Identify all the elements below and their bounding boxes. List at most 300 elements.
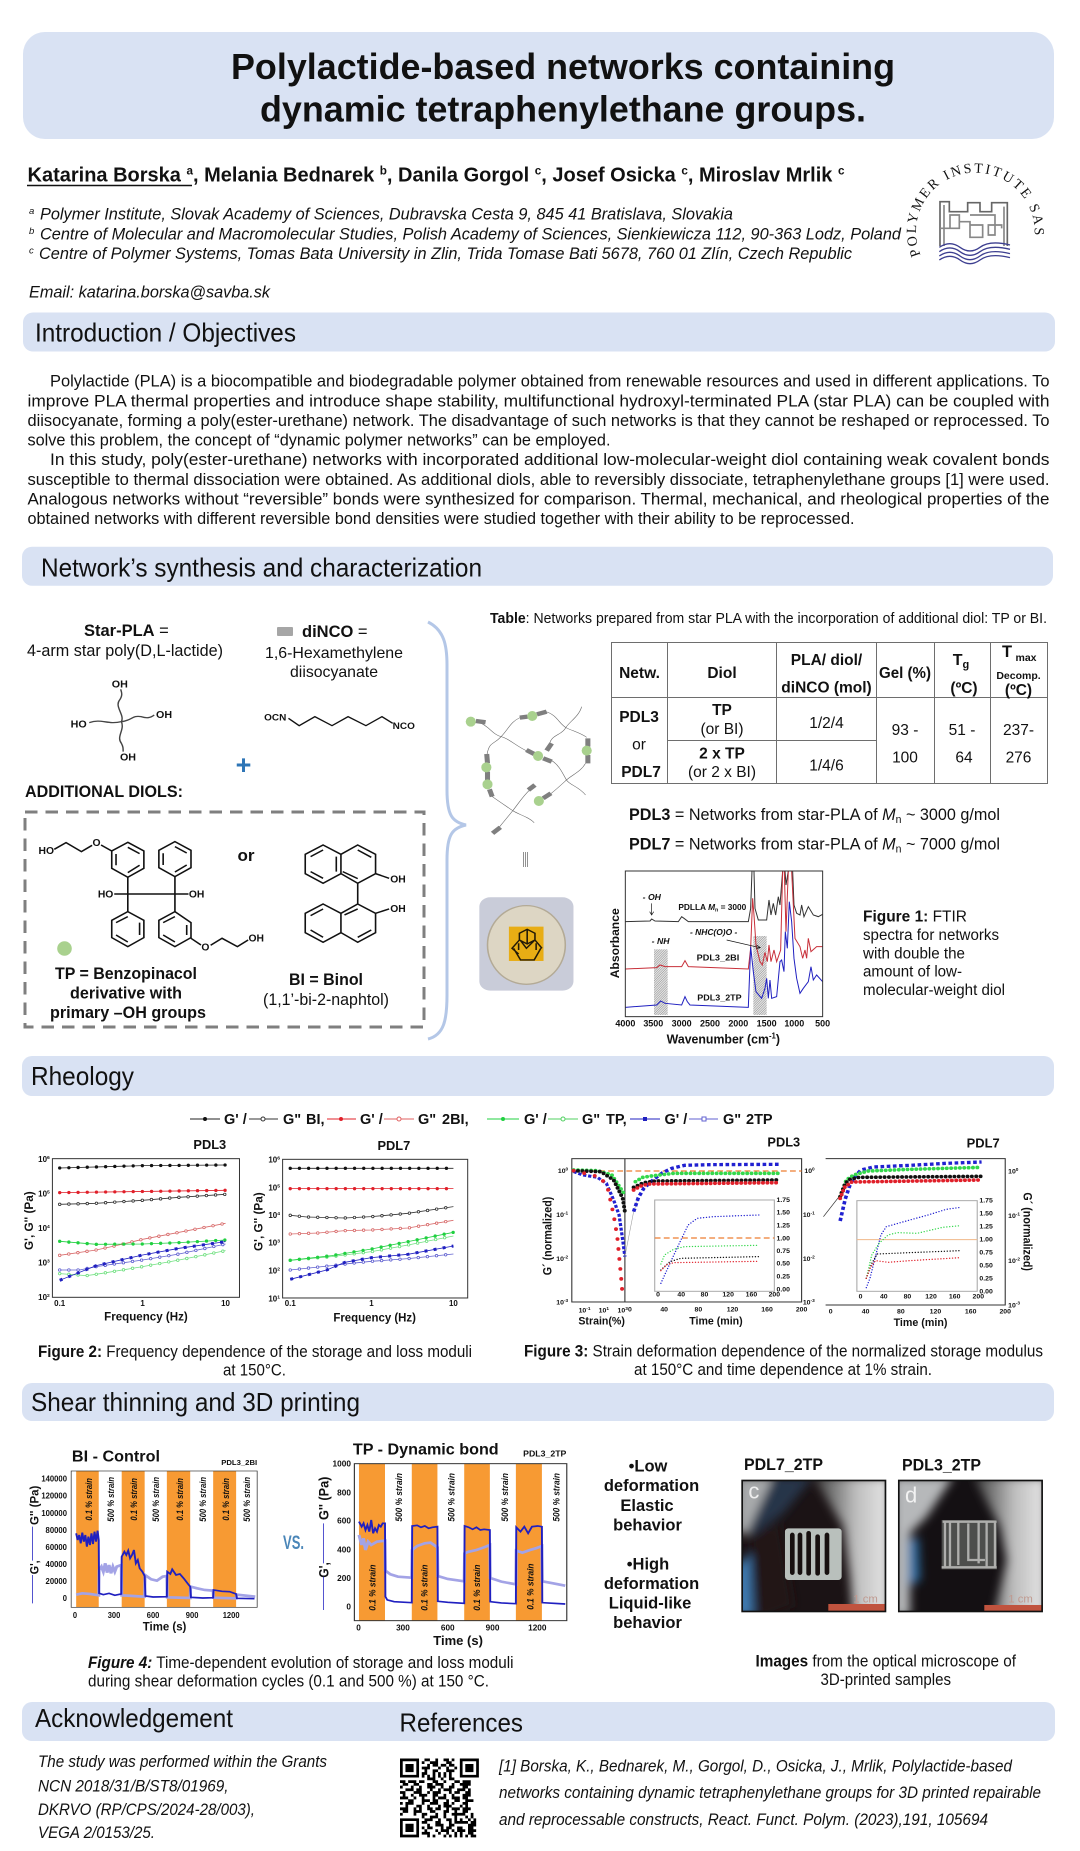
chart: frequency sweep PDL3: 10 — [38, 1293, 47, 1302]
FTIR chart: - NHC(O)O - — [690, 927, 738, 937]
chart: TP dynamic bond cycles: 0.1 % strain — [471, 1564, 482, 1611]
chart: frequency sweep PDL7: 10 — [268, 1266, 277, 1275]
chart: frequency sweep PDL7: 10 — [268, 1239, 277, 1248]
table: networks: 51 - — [949, 722, 975, 739]
chart: strain and time dependence PDL3: 10 — [556, 1256, 564, 1263]
chart: strain and time dependence PDL3: 10 — [618, 1308, 625, 1315]
chart: BI control cycles: 600 — [147, 1611, 160, 1620]
chart: time dependence PDL7: -2 — [1016, 1256, 1020, 1261]
chart: time dependence PDL7: 0.50 — [979, 1263, 993, 1270]
molecule: benzopinacol derivative: O — [201, 943, 210, 953]
rheology legend — [190, 1112, 773, 1128]
figure 2 caption — [38, 1343, 472, 1380]
microscope photos of printed samples — [737, 1477, 1047, 1620]
affiliations — [29, 206, 902, 263]
chart: frequency sweep PDL3: 5 — [47, 1189, 50, 1195]
table: networks: 276 — [1006, 750, 1031, 766]
chart: strain and time dependence PDL3: 10 — [579, 1308, 586, 1315]
chart: strain and time dependence PDL3: Time (min) — [689, 1316, 743, 1327]
equals lines — [524, 852, 528, 867]
table: networks: 64 — [955, 750, 973, 766]
chart: frequency sweep PDL7: 10 — [268, 1183, 277, 1192]
rheology legend: BI, — [306, 1112, 325, 1128]
FTIR chart: ) — [776, 1032, 780, 1046]
chart: frequency sweep PDL7: 1 — [277, 1294, 280, 1300]
chart: frequency sweep PDL3: 10 — [38, 1224, 47, 1233]
chart: TP dynamic bond cycles: 300 — [396, 1623, 410, 1633]
introduction text: Polylactide (PLA) is a biocompatible and biodegradable polymer obtained from renewable resources and used in different applications. To — [50, 373, 1050, 391]
chart: time dependence PDL7: -1 — [1016, 1211, 1020, 1216]
diNCO label — [265, 623, 403, 681]
chart: frequency sweep PDL3: 10 — [38, 1259, 47, 1268]
figure 4 caption: Figure 4: Time-dependent evolution of storage and loss moduli — [88, 1654, 514, 1672]
chart: frequency sweep PDL7: 10 — [268, 1211, 277, 1220]
chart: time dependence PDL7: 200 — [973, 1294, 984, 1301]
photo: network disc — [479, 897, 573, 991]
FTIR chart: 1000 — [784, 1019, 804, 1029]
acknowledgement text — [38, 1753, 327, 1842]
FTIR chart: 1500 — [757, 1019, 777, 1029]
chart: strain and time dependence PDL3: 10 — [556, 1300, 564, 1307]
affiliations: c — [29, 246, 34, 256]
chart: time dependence PDL7: G´ (normalized) — [1020, 1192, 1033, 1271]
chart: strain and time dependence PDL3: 0 — [812, 1167, 815, 1171]
table: networks: Decomp. — [996, 670, 1041, 682]
chart: time dependence PDL7: 80 — [897, 1309, 905, 1315]
chart: strain and time dependence PDL3: 1.00 — [777, 1236, 790, 1242]
chart: TP dynamic bond cycles: G', — [316, 1562, 332, 1578]
table: networks: 237- — [1003, 722, 1034, 739]
figure 2 caption: at 150°C. — [223, 1362, 286, 1380]
chart: strain and time dependence PDL3: 0.75 — [777, 1248, 790, 1255]
chart: frequency sweep PDL7: PDL7 — [377, 1139, 410, 1153]
diNCO label: 1,6-Hexamethylene — [265, 645, 403, 662]
chart: strain and time dependence PDL3: -1 — [586, 1306, 591, 1311]
chart: frequency sweep PDL7: 6 — [277, 1156, 280, 1162]
chart: time dependence PDL7: 40 — [880, 1294, 888, 1301]
chart: strain and time dependence PDL3: 10 — [558, 1168, 566, 1175]
green dot marker for TP — [57, 941, 72, 956]
introduction text: Analogous networks without “reversible” bonds were synthesized for comparison. Thermal, mechanical, and rheological properties of the — [28, 490, 1050, 508]
FTIR chart — [608, 871, 830, 1046]
chart: frequency sweep PDL7: 10 — [268, 1156, 277, 1165]
authors: c — [535, 164, 542, 178]
PDL definitions: n — [896, 814, 901, 826]
chart: BI control cycles: 0 — [63, 1594, 67, 1603]
chart: strain and time dependence PDL3: -1 — [811, 1210, 815, 1215]
figure 2 caption: Figure 2: Frequency dependence of the storage and loss moduli — [38, 1343, 472, 1361]
chart: BI control cycles: 500 % strain — [198, 1477, 208, 1522]
chart: time dependence PDL7: 160 — [949, 1294, 961, 1301]
email: Email: katarina.borska@savba.sk — [29, 284, 271, 302]
rheology legend: G' / — [524, 1112, 547, 1128]
photo titles — [744, 1456, 981, 1474]
chart: TP dynamic bond cycles: 500 % strain — [446, 1473, 456, 1522]
FTIR chart: Absorbance — [608, 908, 622, 978]
table: networks: diNCO (mol) — [781, 680, 872, 696]
authors: , Josef Osicka — [541, 164, 681, 186]
chart: strain and time dependence PDL3: -1 — [564, 1210, 569, 1215]
chart: BI control cycles: 0.1 % strain — [221, 1478, 231, 1521]
chart: strain and time dependence PDL3: 120 — [722, 1292, 734, 1299]
chart: BI control cycles: 120000 — [41, 1491, 67, 1501]
chart: BI control cycles: 300 — [108, 1611, 121, 1620]
chart: TP dynamic bond cycles: 0.1 % strain — [419, 1564, 430, 1611]
molecule: star-PLA and hexamethylene diisocyanate: OH — [112, 680, 128, 691]
table: networks: T — [953, 652, 963, 669]
table: networks — [612, 642, 1048, 784]
plus sign: + — [236, 750, 251, 780]
chart: time dependence PDL7: 120 — [925, 1294, 937, 1301]
chart: strain and time dependence PDL3: 3 — [625, 1306, 628, 1311]
affiliations: Centre of Molecular and Macromolecular Studies, Polish Academy of Sciences, Sienkiewicza 112, 90-363 Lodz, Poland — [40, 226, 902, 244]
introduction text: diisocyanate, forming a poly(ester-urethane) network. The disadvantage of such networks is that they cannot be reshaped or reprocessed. To — [28, 412, 1050, 430]
chart: TP dynamic bond cycles: 1200 — [528, 1623, 547, 1633]
chart: strain and time dependence PDL3: 0.50 — [777, 1261, 790, 1268]
behaviour text: Liquid-like — [609, 1594, 691, 1612]
chart: BI control cycles: Time (s) — [143, 1620, 186, 1633]
molecule: benzopinacol derivative: O — [92, 838, 101, 849]
FTIR chart: 3500 — [643, 1019, 663, 1029]
chart: BI control cycles — [29, 1447, 257, 1633]
rheology legend: G" — [723, 1112, 741, 1128]
section bar: Introduction / Objectives — [23, 312, 1055, 352]
behaviour text — [604, 1458, 699, 1632]
chart: time dependence PDL7: 10 — [1008, 1258, 1016, 1265]
chart: TP dynamic bond cycles: 0.1 % strain — [367, 1564, 378, 1611]
chart: TP dynamic bond cycles: 900 — [486, 1623, 499, 1633]
PDL definitions: PDL3 = Networks from star-PLA of M — [629, 805, 896, 824]
chart: BI control cycles: 100000 — [41, 1509, 67, 1518]
photo titles: PDL7_2TP — [744, 1456, 823, 1474]
acknowledgement text: NCN 2018/31/B/ST8/01969, — [38, 1778, 228, 1796]
chart: time dependence PDL7: Time (min) — [894, 1317, 948, 1329]
introduction text: obtained networks with different reversible bond densities were studied together with their ability to be reprocessed. — [28, 510, 854, 528]
rheology legend: G' / — [224, 1112, 247, 1128]
chart: frequency sweep PDL7: 0.1 — [285, 1299, 296, 1308]
chart: strain and time dependence PDL3: 40 — [660, 1307, 668, 1313]
chart: frequency sweep PDL3: 1 — [140, 1299, 145, 1308]
FTIR chart: = 3000 — [718, 902, 747, 912]
introduction text: In this study, poly(ester-urethane) networks with incorporated additional low-molecular-weight diol containing weak covalent bonds — [50, 451, 1050, 469]
chart: BI control cycles: BI - Control — [72, 1447, 160, 1465]
photo: PDL7_2TP: c — [748, 1478, 759, 1503]
chart: strain and time dependence PDL3: 10 — [803, 1300, 811, 1307]
FTIR chart: -1 — [769, 1032, 776, 1041]
photo: PDL7_2TP: 1 cm — [853, 1594, 878, 1606]
chart: time dependence PDL7: 160 — [965, 1309, 977, 1315]
chart: TP dynamic bond cycles: 1000 — [333, 1459, 351, 1469]
rheology legend: 2BI, — [442, 1112, 469, 1128]
rheology legend: G" — [418, 1112, 436, 1128]
figure 1 caption: spectra for networks — [863, 927, 999, 944]
chart: frequency sweep PDL3: 4 — [47, 1224, 50, 1230]
chart: frequency sweep PDL3: 10 — [38, 1189, 47, 1198]
molecule: star-PLA and hexamethylene diisocyanate: OH — [156, 710, 172, 721]
chart: strain and time dependence PDL3: 200 — [796, 1307, 808, 1313]
chart: frequency sweep PDL7: G', G'' (Pa) — [252, 1192, 266, 1251]
FTIR chart: PDL3_2TP — [697, 993, 742, 1003]
chart: frequency sweep PDL7: 10 — [449, 1299, 458, 1308]
chart: TP dynamic bond cycles: 0 — [356, 1623, 361, 1633]
chart: time dependence PDL7: 1.75 — [979, 1198, 993, 1205]
figure 4 caption — [88, 1654, 514, 1690]
FTIR chart: 2500 — [700, 1019, 720, 1029]
chart: frequency sweep PDL7: 10 — [268, 1294, 277, 1303]
photo titles: PDL3_2TP — [902, 1456, 981, 1474]
behaviour text: •High — [627, 1556, 669, 1574]
chart: BI control cycles: 500 % strain — [242, 1477, 252, 1522]
molecule: star-PLA and hexamethylene diisocyanate: HO — [71, 720, 87, 731]
chart: time dependence PDL7: 0 — [859, 1294, 863, 1301]
chart: BI control cycles: 60000 — [46, 1543, 67, 1552]
rheology legend: G' / — [360, 1112, 383, 1128]
chart: strain and time dependence PDL3: 0 — [566, 1167, 569, 1171]
chart: time dependence PDL7: 10 — [1008, 1213, 1016, 1220]
molecule: benzopinacol derivative — [39, 838, 264, 953]
figure 1 caption: amount of low- — [863, 964, 962, 981]
chart: time dependence PDL7: 0 — [1016, 1167, 1019, 1172]
dashed panel: additional diols — [25, 812, 424, 1027]
figure 4 caption: during shear deformation cycles (0.1 and 500 %) at 150 °C. — [88, 1672, 489, 1690]
molecule: benzopinacol derivative: OH — [189, 890, 204, 901]
chart: time dependence PDL7: 80 — [904, 1294, 912, 1301]
chart: strain and time dependence PDL3: 10 — [803, 1212, 811, 1219]
introduction text: solve this problem, the concept of “dynamic polymer networks” can be employed. — [28, 432, 610, 450]
chart: strain and time dependence PDL3: -3 — [564, 1298, 569, 1303]
affiliations: Centre of Polymer Systems, Tomas Bata University in Zlin, Trida Tomase Bati 5678, 760 01 Zlín, Czech Republic — [39, 245, 853, 263]
table: networks: PLA/ diol/ — [791, 652, 863, 669]
star-PLA label: Star-PLA = — [84, 622, 169, 640]
table: networks: 100 — [892, 750, 918, 766]
chart: strain and time dependence PDL3: -2 — [811, 1254, 815, 1259]
figure 1 caption: molecular-weight diol — [863, 982, 1005, 999]
section bar: Shear thinning and 3D printing — [22, 1383, 1054, 1421]
chart: strain and time dependence PDL3: 0.25 — [777, 1274, 790, 1281]
additional diols heading: ADDITIONAL DIOLS: — [25, 783, 183, 801]
authors: b — [380, 164, 387, 178]
authors: , Danila Gorgol — [387, 164, 535, 186]
molecule: star-PLA and hexamethylene diisocyanate: OH — [120, 753, 136, 763]
chart: BI control cycles: 0.1 % strain — [175, 1478, 185, 1521]
chart: frequency sweep PDL7 — [252, 1139, 468, 1325]
section bar: Acknowledgement and References: Acknowledgement — [35, 1703, 234, 1733]
chart: time dependence PDL7: 10 — [1008, 1303, 1016, 1309]
chart: time dependence PDL7: -3 — [1016, 1301, 1020, 1306]
chart: frequency sweep PDL3: G', G'' (Pa) — [22, 1191, 36, 1250]
chart: strain and time dependence PDL3: 10 — [804, 1168, 812, 1175]
diNCO label: diNCO = — [302, 623, 368, 641]
chart: frequency sweep PDL3: 0.1 — [54, 1299, 66, 1308]
section bar: Rheology — [22, 1056, 1054, 1096]
acknowledgement text: VEGA 2/0153/25. — [38, 1824, 155, 1842]
chart: strain and time dependence PDL3: Strain(%) — [578, 1316, 625, 1327]
section bar: Acknowledgement and References — [22, 1702, 1055, 1741]
molecule: benzopinacol derivative: HO — [98, 890, 114, 901]
chart: frequency sweep PDL7: 2 — [277, 1266, 280, 1272]
chart: BI control cycles: 900 — [186, 1611, 199, 1620]
chart: strain and time dependence PDL3: 40 — [677, 1292, 685, 1299]
chart: time dependence PDL7: 1.25 — [979, 1224, 993, 1231]
chart: frequency sweep PDL3: 10 — [221, 1299, 231, 1308]
chart: time dependence PDL7: 0 — [829, 1309, 833, 1315]
rheology legend: 2TP — [746, 1112, 773, 1128]
chart: BI control cycles: 140000 — [41, 1474, 67, 1483]
images caption: 3D-printed samples — [820, 1671, 951, 1689]
chart: strain and time dependence PDL3: 1.25 — [777, 1223, 790, 1230]
behaviour text: behavior — [613, 1614, 682, 1632]
table: networks: or — [632, 736, 646, 754]
chart: time dependence PDL7: 120 — [930, 1309, 941, 1315]
table: networks: g — [963, 659, 969, 671]
table: networks: (ºC) — [950, 680, 978, 697]
figure 1 caption: with double the — [862, 945, 965, 962]
TP label: primary –OH groups — [50, 1003, 206, 1022]
chart: frequency sweep PDL3: 10 — [38, 1155, 47, 1164]
FTIR chart: 500 — [815, 1019, 830, 1029]
chart: BI control cycles: G', — [29, 1560, 41, 1574]
molecule: binol: OH — [390, 904, 406, 915]
images caption: Images from the optical microscope of — [756, 1652, 1016, 1670]
chart: time dependence PDL7: 1.00 — [979, 1237, 993, 1244]
FTIR chart: - NH — [652, 936, 670, 946]
affiliations: b — [29, 226, 34, 237]
table: networks: TP — [712, 702, 732, 719]
chart: time dependence PDL7: 200 — [999, 1309, 1011, 1315]
chart: strain and time dependence PDL3: 10 — [803, 1256, 811, 1263]
TP label: derivative with — [70, 984, 182, 1002]
chart: TP dynamic bond cycles: 800 — [337, 1488, 351, 1497]
behaviour text: deformation — [604, 1477, 699, 1495]
chart: strain and time dependence PDL3: 160 — [761, 1307, 773, 1313]
chart: TP dynamic bond cycles: 600 — [337, 1516, 351, 1526]
chart: strain and time dependence PDL3: 80 — [695, 1307, 703, 1313]
chart: BI control cycles: G'' (Pa) — [29, 1485, 41, 1525]
chart: strain and time dependence PDL3: 10 — [599, 1308, 606, 1315]
PDL definitions: PDL7 = Networks from star-PLA of M — [629, 834, 896, 854]
section bar: Rheology: Rheology — [31, 1061, 134, 1091]
authors: c — [838, 164, 845, 178]
BI label: BI = Binol — [289, 970, 363, 989]
FTIR chart: Wavenumber (cm — [667, 1032, 772, 1046]
chart: TP dynamic bond cycles: 600 — [441, 1623, 455, 1633]
star-PLA label — [27, 622, 223, 660]
PDL definitions: ~ 3000 g/mol — [901, 805, 1000, 824]
reference text: networks containing dynamic tetraphenylethane groups for 3D printed repairable — [499, 1784, 1041, 1802]
figure 3 caption: at 150°C and time dependence at 1% strain. — [634, 1361, 932, 1379]
network cartoon — [466, 707, 592, 833]
behaviour text: behavior — [613, 1516, 682, 1534]
chart: time dependence PDL7 — [823, 1136, 1033, 1329]
chart: strain and time dependence PDL3: 1.75 — [777, 1197, 790, 1204]
chart: strain and time dependence PDL3: 200 — [769, 1292, 780, 1299]
table: networks: 2 x TP — [699, 746, 745, 762]
chart: strain and time dependence PDL3: 0.00 — [777, 1287, 790, 1293]
images caption — [756, 1652, 1016, 1689]
chart: strain and time dependence PDL3: 0 — [628, 1307, 632, 1313]
chart: BI control cycles: 80000 — [46, 1526, 67, 1535]
star-PLA label: 4-arm star poly(D,L-lactide) — [27, 642, 223, 660]
chart: TP dynamic bond cycles: 0.1 % strain — [525, 1563, 536, 1610]
chart: frequency sweep PDL3: Frequency (Hz) — [104, 1310, 188, 1324]
TP label: TP = Benzopinacol — [55, 964, 197, 983]
chart: TP dynamic bond cycles: Time (s) — [433, 1634, 483, 1649]
FTIR chart: 4000 — [615, 1019, 635, 1029]
FTIR chart: PDL3_2BI — [697, 953, 739, 963]
section bar: Introduction / Objectives: Introduction / Objectives — [35, 318, 296, 348]
chart: frequency sweep PDL3: 2 — [47, 1293, 50, 1299]
chart: time dependence PDL7: 0.25 — [979, 1276, 993, 1282]
chart: BI control cycles: 0.1 % strain — [84, 1478, 94, 1521]
chart: time dependence PDL7: 0.00 — [979, 1289, 993, 1296]
chart: TP dynamic bond cycles: 200 — [337, 1574, 351, 1583]
FTIR chart: n — [715, 908, 718, 914]
chart: frequency sweep PDL7: 1 — [369, 1299, 374, 1308]
reference text: [1] Borska, K., Bednarek, M., Gorgol, D., Osicka, J., Mrlik, Polylactide-based — [498, 1758, 1013, 1776]
section bar: Shear thinning and 3D printing: Shear thinning and 3D printing — [31, 1387, 360, 1417]
chart: TP dynamic bond cycles: 500 % strain — [394, 1473, 404, 1522]
title banner — [23, 32, 1054, 139]
chart: frequency sweep PDL3: 6 — [47, 1155, 50, 1161]
chart: time dependence PDL7: 0.75 — [979, 1250, 993, 1257]
authors: , Melania Bednarek — [193, 164, 380, 186]
chart: frequency sweep PDL3: 3 — [47, 1259, 50, 1265]
diNCO label: diisocyanate — [290, 664, 378, 681]
acknowledgement text: The study was performed within the Grants — [38, 1753, 327, 1771]
title banner: Polylactide-based networks containing — [231, 46, 895, 87]
PDL definitions: ~ 7000 g/mol — [901, 834, 1000, 854]
figure 3 caption — [524, 1342, 1043, 1379]
authors — [27, 164, 845, 186]
chart: TP dynamic bond cycles: 400 — [337, 1545, 351, 1554]
BI label — [263, 970, 389, 1009]
figure 3 caption: Figure 3: Strain deformation dependence of the normalized storage modulus — [524, 1342, 1043, 1360]
chart: time dependence PDL7: 40 — [862, 1309, 870, 1315]
chart: BI control cycles: 500 % strain — [107, 1477, 116, 1522]
chart: BI control cycles: 0.1 % strain — [130, 1478, 139, 1521]
figure 1 caption — [862, 909, 1005, 999]
chart: strain and time dependence PDL3 — [542, 1135, 815, 1327]
PDL definitions: n — [896, 844, 901, 856]
authors: , Miroslav Mrlik — [688, 164, 838, 186]
affiliations: Polymer Institute, Slovak Academy of Sciences, Dubravska Cesta 9, 845 41 Bratislava, Slovakia — [40, 206, 733, 224]
chart: strain and time dependence PDL3: 1 — [606, 1306, 609, 1311]
FTIR chart: PDLLA M — [678, 902, 715, 912]
introduction text — [28, 373, 1050, 528]
table: networks: T — [1002, 643, 1012, 661]
chart: strain and time dependence PDL3: 0 — [656, 1292, 660, 1299]
chart: frequency sweep PDL7: Frequency (Hz) — [333, 1311, 416, 1325]
chart: BI control cycles: PDL3_2BI — [221, 1458, 257, 1467]
molecule: star-PLA and hexamethylene diisocyanate: OCN — [264, 713, 286, 723]
table: networks: 1/4/6 — [809, 758, 844, 774]
reference text — [498, 1758, 1041, 1829]
photo: PDL3_2TP: 1 cm — [1008, 1594, 1033, 1606]
photo: PDL7_2TP — [741, 1480, 886, 1612]
chart: strain and time dependence PDL3: 80 — [701, 1292, 709, 1299]
affiliations: a — [29, 206, 34, 217]
authors: a — [186, 164, 193, 178]
chart: strain and time dependence PDL3: 160 — [746, 1292, 758, 1299]
curly bracket — [428, 622, 466, 1039]
chart: frequency sweep PDL3 — [22, 1138, 239, 1324]
title banner: dynamic tetraphenylethane groups. — [260, 88, 866, 130]
chart: BI control cycles: 20000 — [46, 1577, 67, 1586]
molecule: benzopinacol derivative: OH — [248, 934, 264, 944]
chart: frequency sweep PDL7: 5 — [277, 1183, 280, 1189]
chart: BI control cycles: 40000 — [46, 1560, 67, 1569]
chart: time dependence PDL7: PDL7 — [967, 1136, 1000, 1150]
